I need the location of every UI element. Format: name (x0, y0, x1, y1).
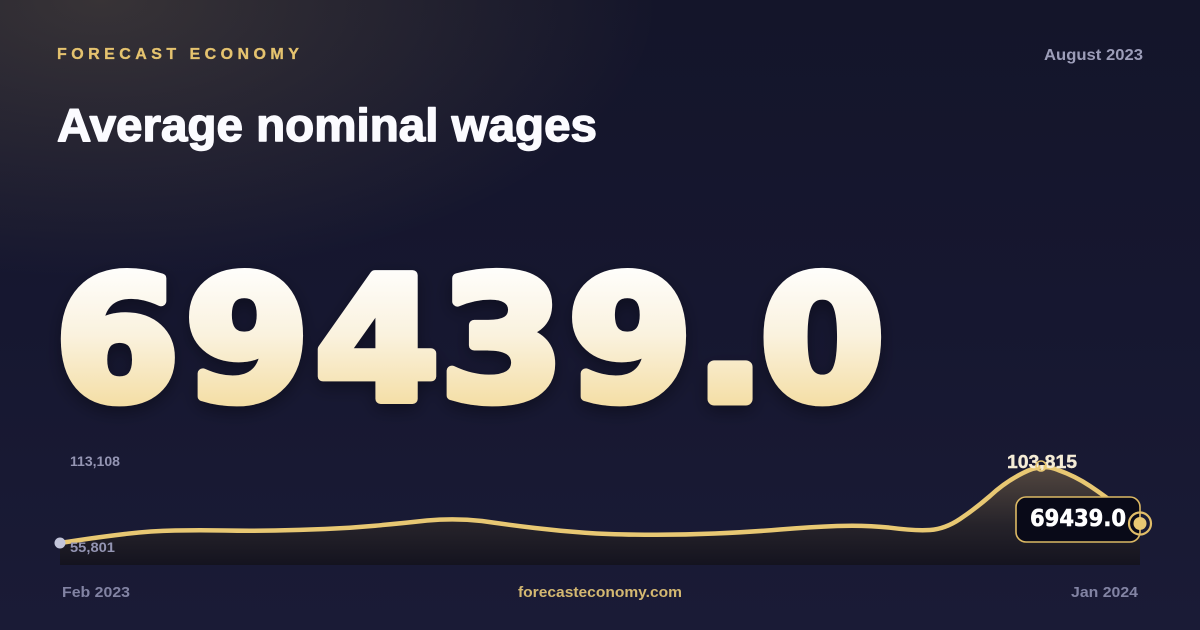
peak marker (1036, 461, 1046, 471)
axis min label: 55,801 (70, 539, 115, 555)
big number: 0 (760, 242, 884, 440)
axis max label: 113,108 (70, 453, 120, 469)
value callout (1016, 497, 1140, 542)
website: forecasteconomy.com (518, 584, 682, 601)
trend line (60, 467, 1140, 543)
max label: 103,815 (1007, 452, 1077, 472)
chart: nominal wages trend (54, 452, 1151, 565)
start date label: Feb 2023 (62, 584, 130, 601)
title: Average nominal wages (57, 99, 597, 151)
big number: . (696, 242, 764, 440)
start point marker (54, 538, 66, 548)
big number: 69439 (55, 242, 692, 440)
eyebrow: Forecast Economy: FORECAST ECONOMY (57, 46, 303, 63)
value callout: 69439.0 (1030, 506, 1126, 532)
date: August 2023 (1044, 47, 1143, 64)
end point marker (1129, 512, 1151, 534)
end date label: Jan 2024 (1071, 584, 1139, 601)
chart area fill (60, 467, 1140, 565)
